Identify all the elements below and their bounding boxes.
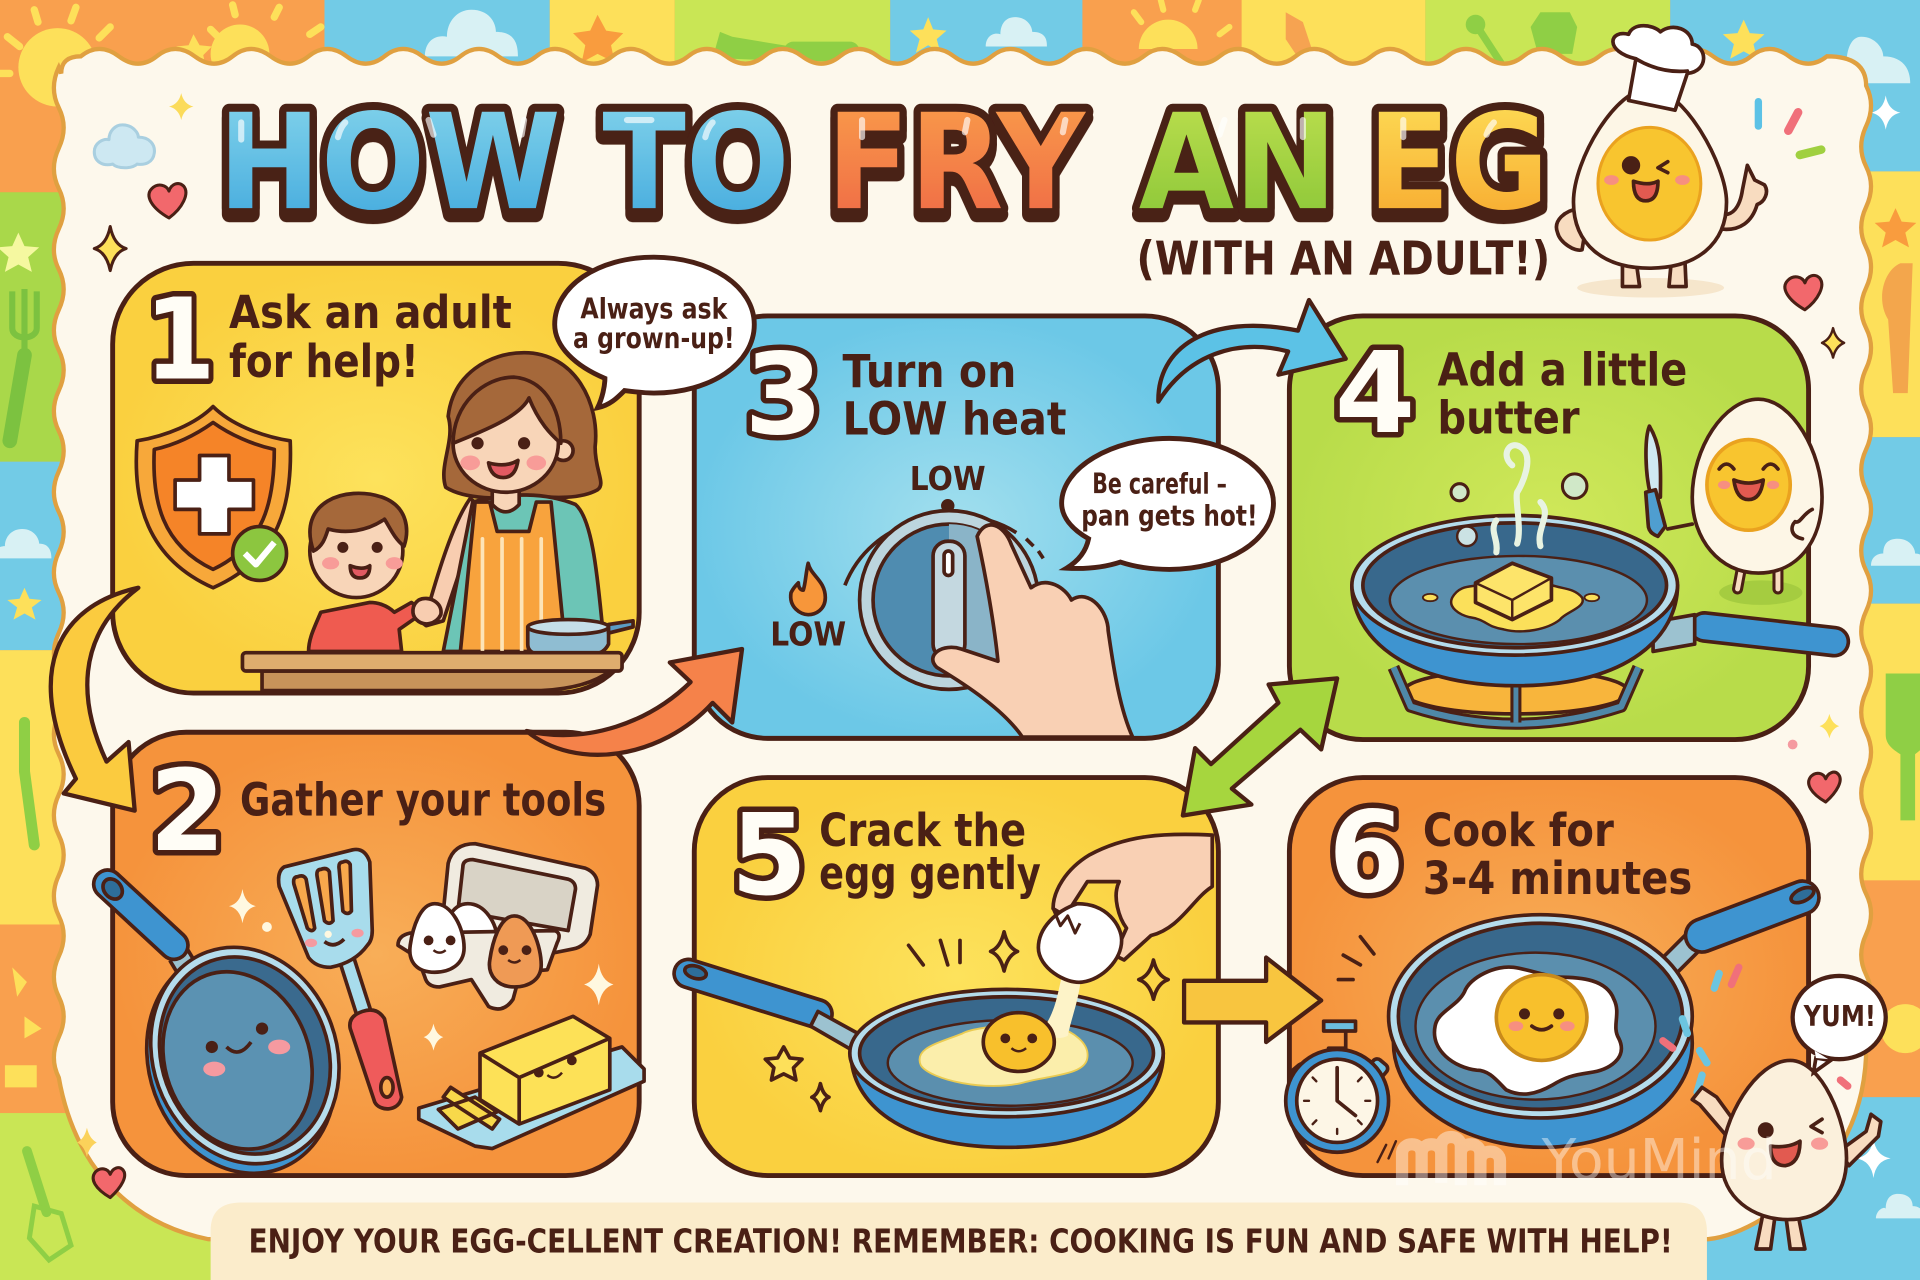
panel background [113,263,639,693]
panel 1: ask an adult [113,263,639,693]
arrow: step 3 to 4 [1158,300,1346,402]
mascot: happy egg [1692,1060,1881,1249]
title word: FRY: FRY [827,86,1087,240]
steam and bubbles [1451,445,1587,552]
icon: pan with butter [1352,516,1834,686]
icon: safety shield [136,407,290,588]
mascot: egg with knife [1646,399,1822,605]
illustration: saucepan and counter [242,620,633,691]
panel background [694,778,1218,1176]
illustration: parent [414,353,602,651]
title [218,86,1549,240]
title shine [241,120,1494,140]
bottom banner [211,1202,1707,1280]
panel background [1289,778,1809,1176]
speech bubble: yum [1793,976,1886,1073]
step heading: Add a little [1438,344,1687,397]
mascot: chef egg [1556,26,1826,298]
panel background [113,732,639,1176]
panel background [694,316,1218,738]
step number 6: 6 [1329,786,1404,918]
title word: AN: AN [1139,86,1337,240]
step heading: 3-4 minutes [1423,852,1692,905]
step heading [229,286,512,388]
icon: frying pan [99,875,369,1200]
panel 6: cook for 3-4 minutes [1286,778,1886,1249]
subtitle: (WITH AN ADULT!) [1136,231,1550,285]
motion marks and confetti [1338,937,1848,1100]
panel 2: gather your tools [99,732,644,1200]
icon: pan with fried egg [1389,884,1816,1147]
sparkles [229,889,613,1051]
stove dial [770,459,1043,689]
arrow: step 1 to 2 [51,588,138,811]
panel 5: crack the egg [683,778,1218,1176]
step heading: Turn on [842,345,1016,398]
decorative sparkles and hearts [77,93,1844,1198]
icon: pan with cracked egg [683,963,1163,1147]
step heading: butter [1438,391,1580,444]
icon: burner [1393,667,1638,724]
title word: HOW: HOW [218,86,561,240]
egg stream and yolk [983,950,1081,1071]
step heading: Crack the [819,804,1026,857]
speech bubble: be careful [1062,438,1273,569]
title word: EG: EG [1368,86,1549,240]
step heading [1438,344,1687,444]
speech bubble: yum: YUM! [1803,1000,1876,1033]
arrow: step 2 to 3 [527,649,742,755]
panel 4: add a little butter [1289,316,1834,740]
speech bubble: always ask a grown-up: Always ask [580,292,728,325]
speech bubble: always ask a grown-up: a grown-up! [573,322,735,355]
step heading [842,345,1067,446]
step heading: egg gently [819,847,1041,900]
stove dial: LOW [910,459,986,498]
watermark: YouMind [1541,1128,1777,1193]
step heading: for help! [229,335,419,388]
impact marks and stars [765,932,1168,1111]
step heading: Ask an adult [229,286,512,339]
step heading: Gather your tools [240,774,606,827]
step heading: LOW heat [842,393,1067,446]
speech bubble: be careful: pan gets hot! [1081,499,1258,532]
step number 4: 4 [1335,327,1416,459]
step number 5: 5 [731,789,807,921]
illustration: child [309,493,441,651]
panel background [1289,316,1809,740]
icon: butter on dish [419,1016,644,1149]
banner text: ENJOY YOUR EGG-CELLENT CREATION! REMEMBER: COOKING IS FUN AND SAFE WITH HELP! [249,1222,1673,1261]
panel 3: turn on low heat [694,316,1273,738]
speech bubble: be careful: Be careful – [1092,467,1227,500]
step number 2: 2 [149,745,225,877]
icon: hand and eggshell [1038,834,1212,982]
icon: spatula [279,849,402,1109]
step heading [1423,804,1692,905]
step heading [819,804,1041,900]
icon: stopwatch [1286,1021,1396,1162]
arrow: step 4 to 5 [1183,678,1337,816]
speech bubble: always ask a grown-up [555,257,754,408]
title word: TO: TO [602,86,790,240]
step heading: Cook for [1423,804,1614,857]
arrow: step 5 to 6 [1184,958,1321,1042]
step number 3: 3 [744,328,823,460]
icon: egg carton [398,844,598,1009]
watermark [1402,1128,1777,1193]
step number 1: 1 [144,273,216,405]
stove dial: LOW [770,614,846,653]
icon: hand turning dial [933,525,1133,737]
